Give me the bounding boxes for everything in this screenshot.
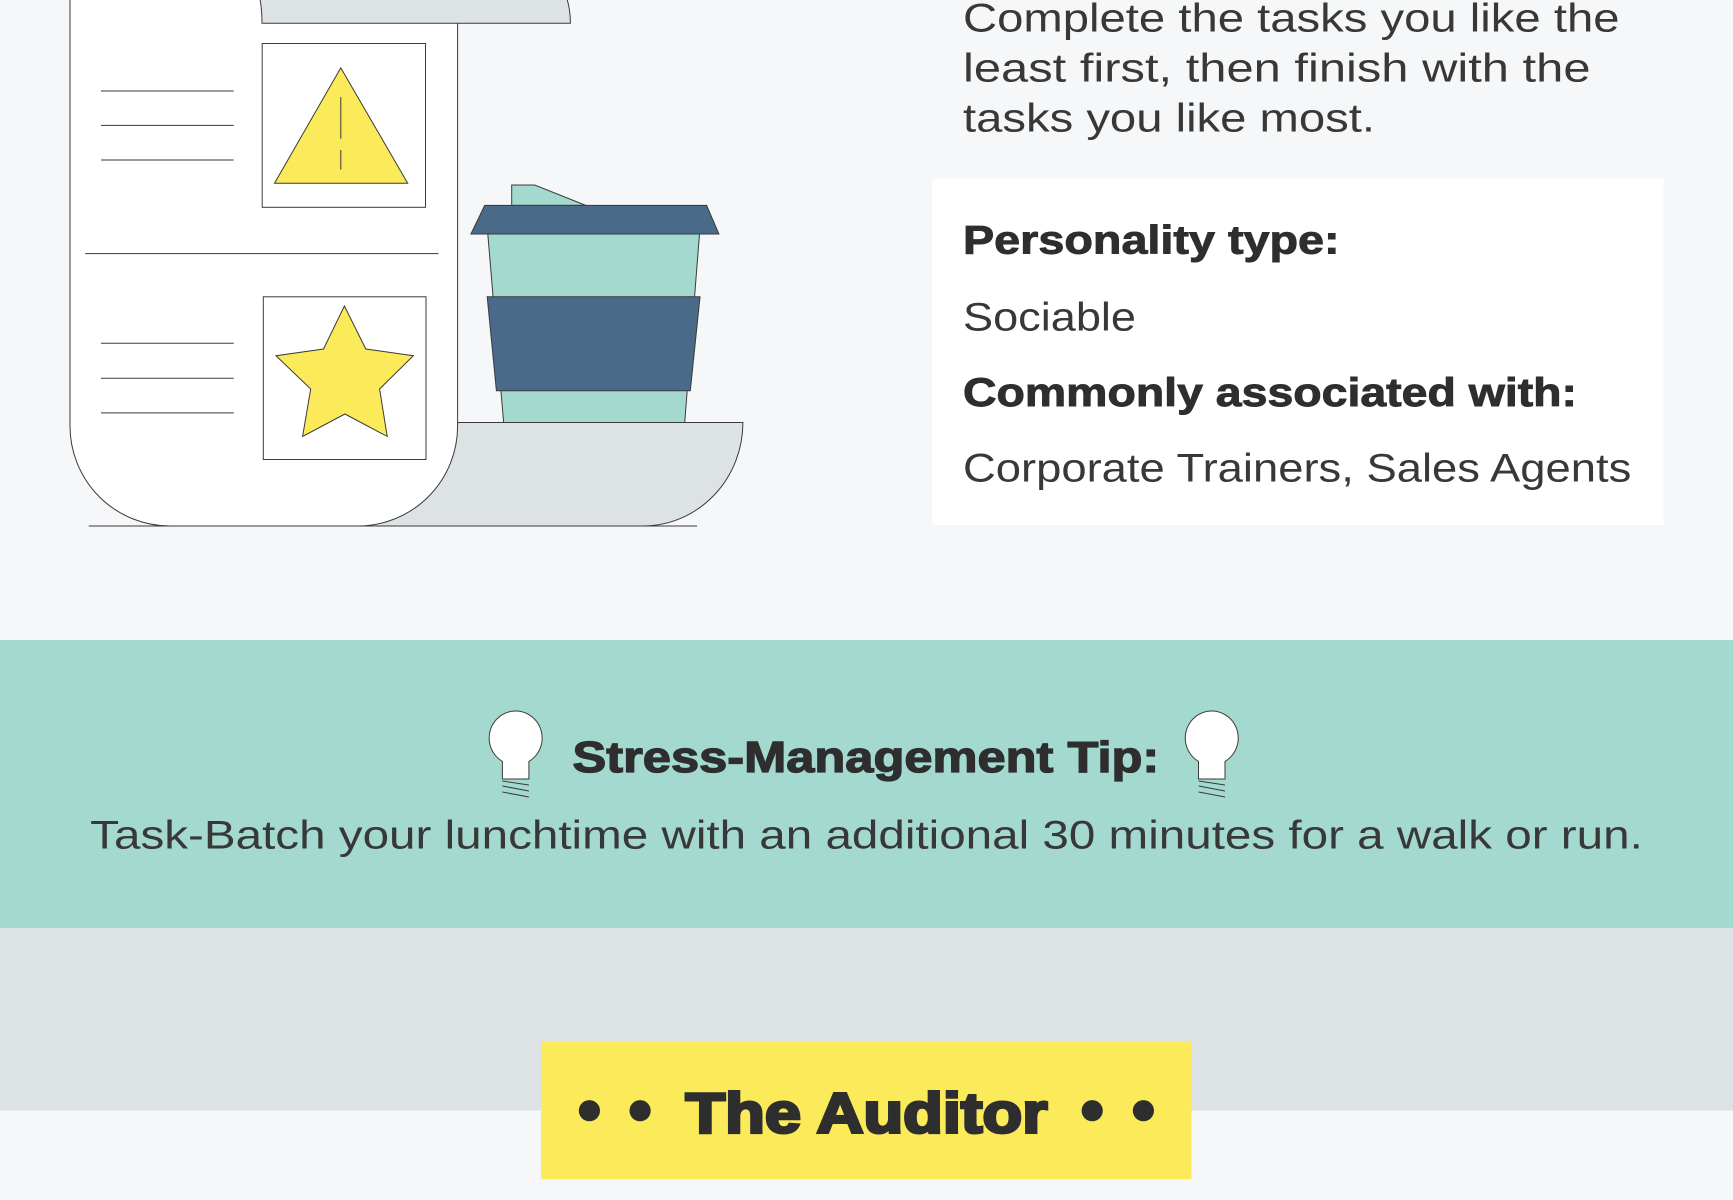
decorative dots left bbox=[579, 1100, 651, 1121]
grey band bbox=[0, 928, 1733, 1110]
icon: star in box bbox=[263, 297, 426, 460]
divider bbox=[85, 253, 438, 255]
heading: stress-management tip: Stress-Management Tip: bbox=[572, 733, 1159, 782]
heading: the auditor: The Auditor bbox=[686, 1081, 1048, 1145]
icon: light bulb right bbox=[1185, 711, 1238, 797]
text lines lower bbox=[101, 343, 234, 413]
icon: coffee cup bbox=[471, 185, 719, 422]
illustration: document and coffee cup bbox=[70, 0, 743, 526]
icon: light bulb left bbox=[489, 711, 542, 797]
decorative dots right bbox=[1082, 1100, 1154, 1121]
text: professions: Corporate Trainers, Sales Agents bbox=[963, 446, 1631, 490]
grey tray behind document bbox=[340, 422, 743, 526]
tip text: Task-Batch your lunchtime with an additional 30 minutes for a walk or run. bbox=[90, 813, 1643, 857]
heading: commonly associated with: Commonly associated with: bbox=[963, 371, 1577, 415]
ground line bbox=[89, 525, 697, 527]
banner: the auditor bbox=[541, 1042, 1192, 1179]
document sheet bbox=[70, 0, 458, 526]
heading: personality type: Personality type: bbox=[963, 219, 1340, 263]
body text: task order advice: tasks you like most. bbox=[963, 96, 1375, 140]
grey curled page at top bbox=[260, 0, 570, 23]
panel: personality details bbox=[932, 179, 1664, 525]
body text: task order advice: least first, then finish with the bbox=[963, 46, 1590, 90]
text: sociable: Sociable bbox=[963, 295, 1136, 339]
text lines upper bbox=[101, 91, 234, 160]
icon: warning triangle in box bbox=[262, 44, 426, 207]
body text: task order advice bbox=[963, 0, 1620, 140]
panel: stress-management tip bbox=[0, 640, 1733, 928]
